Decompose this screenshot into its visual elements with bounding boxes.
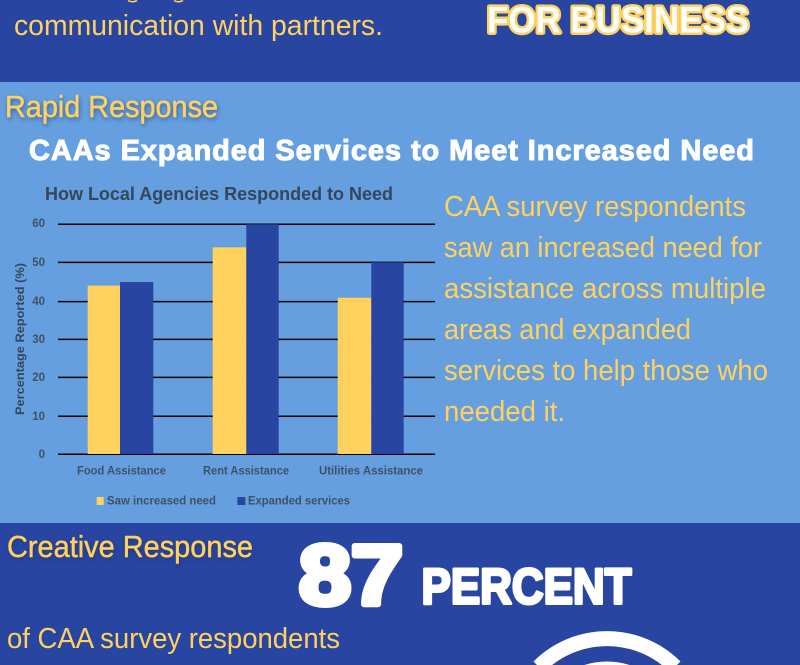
panel: creative response xyxy=(0,523,800,665)
legend xyxy=(97,496,350,508)
heading: creative response: Creative Response xyxy=(7,529,253,564)
icon: wifi arcs xyxy=(539,639,675,665)
x axis labels xyxy=(77,466,423,478)
subheading: CAAs Expanded Services to Meet Increased Need xyxy=(29,135,754,167)
y axis labels: 0 xyxy=(39,449,45,461)
text block: chart commentary xyxy=(444,191,768,428)
y axis labels xyxy=(32,218,45,461)
heading: for business: FOR BUSINESS xyxy=(487,0,749,40)
stat: 87: 87 xyxy=(299,528,403,622)
chart title: How Local Agencies Responded to Need xyxy=(45,184,393,204)
y axis labels: 50 xyxy=(32,257,45,269)
text block: chart commentary: assistance across multiple xyxy=(444,273,766,305)
bars: utilities assistance xyxy=(338,262,404,454)
bars: food assistance xyxy=(88,282,153,454)
legend: Expanded services xyxy=(248,496,350,508)
cropped line descenders xyxy=(128,0,183,2)
y axis labels: 60 xyxy=(32,218,45,230)
panel: rapid response xyxy=(0,82,800,523)
y axis labels: 40 xyxy=(32,296,45,308)
x axis labels: Food Assistance xyxy=(77,466,166,478)
x axis labels: Utilities Assistance xyxy=(319,466,423,478)
legend: Saw increased need xyxy=(107,496,216,508)
y axis title: Percentage Reported (%) xyxy=(15,263,27,415)
text block: chart commentary: saw an increased need for xyxy=(444,232,762,264)
text block: chart commentary: CAA survey respondents xyxy=(444,191,746,223)
y axis labels: 30 xyxy=(32,334,45,346)
text block: chart commentary: needed it. xyxy=(444,396,565,428)
bars: rent assistance xyxy=(213,224,279,454)
text block: chart commentary: services to help those who xyxy=(444,355,768,387)
y axis labels: 10 xyxy=(32,411,45,423)
stat label: percent: PERCENT xyxy=(422,558,632,614)
heading: rapid response: Rapid Response xyxy=(5,89,218,124)
y axis labels: 20 xyxy=(32,372,45,384)
text block: chart commentary: areas and expanded xyxy=(444,314,691,346)
text: of CAA survey respondents: of CAA survey respondents xyxy=(7,623,340,655)
x axis labels: Rent Assistance xyxy=(203,466,289,478)
panel: top banner xyxy=(0,0,800,83)
bar chart xyxy=(15,184,435,508)
text: communication: communication with partners. xyxy=(14,10,383,42)
